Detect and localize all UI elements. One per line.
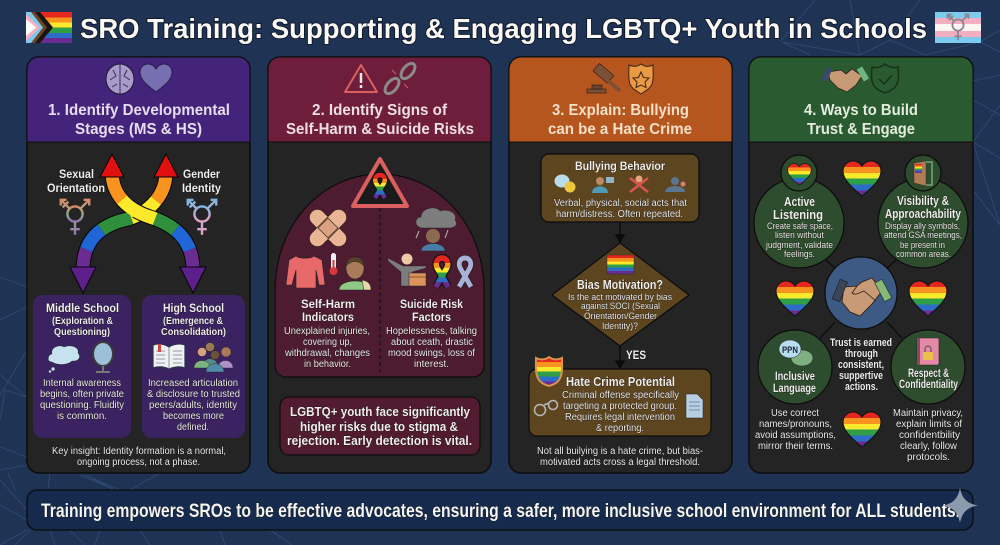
- icon: people group: [194, 342, 233, 372]
- flow diamond: bias motivation: Is the act motivated by bias: [568, 292, 672, 303]
- panel 4 header: [749, 57, 973, 142]
- card: middle school: [33, 295, 131, 438]
- icon: person speaking: [592, 177, 614, 193]
- text: confidentiality details: [893, 408, 963, 463]
- panel 2 heading: Self-Harm & Suicide Risks: [286, 121, 474, 138]
- panel 4 heading: Trust & Engage: [807, 121, 915, 138]
- text: self-harm indicators: Unexplained injuries,: [284, 326, 370, 337]
- flow box: hate crime potential: Hate Crime Potential: [566, 374, 675, 389]
- panel 4 heading: [804, 102, 918, 138]
- label: gender identity: [182, 167, 221, 235]
- flow box: hate crime potential: targeting a protected group.: [563, 401, 677, 412]
- text: suicide risk factors: Suicide Risk: [400, 297, 463, 311]
- node: visibility and approachability: [878, 155, 968, 268]
- note: legal threshold: Not all builying is a hate crime, but bias-: [537, 446, 703, 457]
- icon: mirror: [93, 342, 113, 372]
- icon: thermometer: [330, 253, 338, 275]
- node: respect and confidentiality: [891, 330, 965, 404]
- node: active listening: judgment, validate: [765, 240, 833, 251]
- icon: transgender flag: [935, 12, 981, 43]
- icon: person with covered arm: [339, 257, 371, 290]
- panel 1 header: [27, 57, 250, 142]
- icon: rainbow heart top: [843, 161, 881, 196]
- flow box: hate crime potential: [529, 357, 711, 436]
- panel: developmental stages: [27, 57, 250, 473]
- card: middle school: questioning. Fluidity: [40, 400, 124, 411]
- text: suicide risk factors: [386, 297, 477, 370]
- text: suicide risk factors: Factors: [412, 310, 451, 324]
- connector lines: [820, 260, 902, 338]
- flow diamond: bias motivation: Bias Motivation?: [577, 278, 663, 292]
- text: self-harm indicators: Indicators: [302, 310, 354, 324]
- text: self-harm indicators: [284, 297, 370, 370]
- card: high school: peers/adults, identity: [149, 400, 237, 411]
- flow box: bullying behavior: Bullying Behavior: [575, 159, 665, 173]
- callout: higher risks: rejection. Early detection is vital.: [287, 433, 472, 448]
- callout: higher risks: higher risks due to stigma &: [300, 419, 458, 434]
- card: high school: Increased articulation: [148, 378, 238, 389]
- icon: thought cloud: [48, 346, 80, 373]
- flow diamond: bias motivation: Orientation/Gender: [584, 311, 657, 322]
- icon: rainbow heart right: [909, 281, 947, 316]
- icon: speech and sad face: [554, 174, 576, 192]
- center node: handshake: [825, 257, 897, 329]
- icon: locked notebook: [917, 338, 939, 365]
- node: respect and confidentiality: Respect &: [908, 366, 949, 380]
- node: visibility and approachability: attend GSA meetings,: [884, 230, 962, 241]
- label: gender identity: Identity: [182, 181, 221, 195]
- text: suicide risk factors: interest.: [414, 359, 449, 370]
- icon: broken chain: [382, 61, 418, 96]
- text: inclusive language details: [755, 408, 836, 452]
- panel: self-harm and suicide risks: [268, 57, 491, 473]
- text: suicide risk factors: Hopelessness, talking: [386, 326, 477, 337]
- card: high school: & disclosure to trusted: [147, 389, 240, 400]
- card: middle school: begins, often private: [40, 389, 124, 400]
- icon: heart: [788, 164, 811, 185]
- card: middle school: (Exploration &: [52, 316, 113, 327]
- text: trust is earned: through: [845, 348, 878, 360]
- note: legal threshold: [537, 446, 703, 468]
- node: visibility and approachability: common areas.: [896, 249, 951, 260]
- icon: police badge: [629, 64, 653, 94]
- icon: gavel: [587, 63, 620, 93]
- panel 1 heading: Stages (MS & HS): [75, 121, 202, 138]
- node: active listening: Create safe space,: [767, 221, 833, 232]
- flow diamond: bias motivation: against SOCI (Sexual: [581, 301, 660, 312]
- icon: rainbow ribbon: [436, 258, 448, 287]
- panel 4 heading: 4. Ways to Build: [804, 102, 918, 119]
- card: high school: becomes more: [163, 411, 224, 422]
- flow box: hate crime potential: Criminal offense specifically: [562, 390, 679, 401]
- card: high school: (Emergence &: [163, 316, 223, 327]
- panel 2 header: [268, 57, 491, 142]
- callout: higher risks: [280, 397, 480, 455]
- flow box: bullying behavior: harm/distress. Often repeated.: [556, 209, 683, 220]
- icon: document: [686, 394, 703, 418]
- icon: brain: [106, 64, 134, 94]
- node: inclusive language: Inclusive: [775, 369, 815, 383]
- text: self-harm indicators: Self-Harm: [301, 297, 355, 311]
- node: visibility and approachability: Approachability: [885, 207, 961, 221]
- crossing rainbow arrows chart: [70, 154, 206, 293]
- note: legal threshold: motivated acts cross a legal threshold.: [540, 457, 700, 468]
- panel 3 heading: [548, 102, 692, 138]
- card: middle school: Questioning): [54, 327, 110, 338]
- flow box: hate crime potential: Requires legal intervention: [565, 412, 675, 423]
- label: sexual orientation: Orientation: [47, 181, 105, 195]
- icon: speech bubbles: PPN: [782, 345, 798, 355]
- icon: crossed bandages: [306, 206, 350, 250]
- arrow: behavior to bias: [616, 222, 624, 242]
- text: self-harm indicators: withdrawal, changes: [284, 348, 370, 359]
- node: visibility and approachability: Visibility &: [897, 194, 949, 208]
- card: middle school: Internal awareness: [43, 378, 121, 389]
- panel 2 heading: [286, 102, 474, 138]
- icon: warning triangle: [345, 65, 377, 92]
- panel 1 heading: 1. Identify Developmental: [48, 102, 230, 119]
- footer banner: [27, 488, 978, 530]
- key insight note: ongoing process, not a phase.: [77, 457, 200, 468]
- text: suicide risk factors: about ceath, drastic: [391, 337, 473, 348]
- text: inclusive language details: mirror their terms.: [758, 441, 833, 452]
- text: suicide risk factors: mood swings, loss of: [388, 348, 475, 359]
- label: sexual orientation: Sexual: [59, 167, 94, 181]
- text: inclusive language details: Use correct: [771, 408, 819, 419]
- icon: rainbow shield: [536, 357, 562, 386]
- node: respect and confidentiality: Confidentiality: [899, 377, 958, 391]
- card: high school: defined.: [177, 422, 209, 433]
- text: self-harm indicators: in behavior.: [304, 359, 351, 370]
- title: [26, 12, 981, 44]
- icon: heart: [140, 64, 172, 92]
- text: confidentiality details: clearly, follow: [900, 441, 958, 452]
- node: active listening: [754, 155, 844, 268]
- node: active listening: Active: [784, 195, 815, 209]
- panel: bullying can be a hate crime: [509, 57, 732, 473]
- icon: excluded group: [665, 177, 686, 192]
- card: high school: [142, 295, 245, 438]
- text: inclusive language details: avoid assumptions,: [755, 430, 836, 441]
- text: confidentiality details: confidentbility: [899, 430, 960, 441]
- text: trust is earned: Trust is earned: [830, 337, 892, 349]
- callout: higher risks: LGBTQ+ youth face significantly: [290, 404, 471, 419]
- arrow: yes to hate crime: YES: [626, 348, 646, 362]
- icon: person giving away box: [388, 254, 426, 286]
- card: middle school: is common.: [57, 411, 107, 422]
- icon: crossed person: [630, 176, 648, 192]
- icon: door: [914, 161, 932, 186]
- text: confidentiality details: explain limits of: [896, 419, 962, 430]
- icon: handcuffs: [534, 400, 558, 416]
- text: self-harm indicators: covering up,: [303, 337, 352, 348]
- panel 3 header: [509, 57, 732, 142]
- icon: progress pride flag: [26, 12, 72, 43]
- node: inclusive language: [758, 330, 832, 404]
- icon: storm cloud over person: [416, 208, 456, 251]
- icon: warning ribbon triangle: [353, 159, 407, 206]
- text: trust is earned: actions.: [845, 381, 878, 393]
- icon: handshake: [821, 66, 869, 92]
- panel 3 heading: can be a Hate Crime: [548, 121, 692, 138]
- icon: lavender ribbon: [459, 258, 471, 287]
- card: high school: High School: [163, 301, 224, 315]
- text: confidentiality details: Maintain privacy,: [893, 408, 963, 419]
- node: inclusive language: Language: [773, 381, 816, 395]
- text: confidentiality details: protocols.: [907, 452, 950, 463]
- icon: sparkle star: [943, 488, 978, 523]
- panel 2 heading: 2. Identify Signs of: [312, 102, 448, 119]
- node: active listening: listen without: [775, 230, 824, 241]
- icon: rainbow heart bottom: [843, 412, 881, 447]
- icon: rainbow heart left: [776, 281, 814, 316]
- flow box: bullying behavior: [541, 154, 699, 222]
- arrow: yes to hate crime: [616, 346, 646, 368]
- text: inclusive language details: names/pronouns,: [759, 419, 832, 430]
- node: visibility and approachability: Display ally symbols,: [885, 221, 960, 232]
- label: sexual orientation: [47, 167, 105, 235]
- text: trust is earned: [830, 337, 892, 393]
- node: visibility and approachability: be present in: [900, 240, 945, 251]
- card: high school: Consolidation): [161, 327, 226, 338]
- key insight note: Key insight: Identity formation is a normal,: [52, 446, 226, 457]
- icon: open book: [153, 344, 185, 369]
- panel: ways to build trust: [749, 57, 973, 473]
- flow box: bullying behavior: Verbal, physical, social acts that: [554, 198, 687, 209]
- key insight note: [52, 446, 226, 468]
- text: trust is earned: suppertive: [839, 370, 883, 382]
- panel 1 heading: [48, 102, 230, 138]
- card: middle school: Middle School: [46, 301, 119, 315]
- icon: shield check: [871, 64, 899, 93]
- text: trust is earned: consistent,: [838, 359, 884, 371]
- panel 3 heading: 3. Explain: Bullying: [552, 102, 689, 119]
- title text: SRO Training: Supporting & Engaging LGBTQ+ Youth in Schools: [80, 13, 927, 44]
- arch panel: indicators and risk factors: [275, 159, 484, 377]
- flow diamond: bias motivation: [552, 243, 689, 346]
- node: active listening: feelings.: [784, 249, 815, 260]
- icon: long sleeve shirt: [286, 256, 325, 288]
- node: active listening: Listening: [773, 208, 823, 222]
- icon: rainbow flag: [607, 255, 634, 274]
- flow box: hate crime potential: & reporting.: [596, 423, 644, 434]
- flow diamond: bias motivation: Identity)?: [602, 321, 638, 332]
- label: gender identity: Gender: [183, 167, 220, 181]
